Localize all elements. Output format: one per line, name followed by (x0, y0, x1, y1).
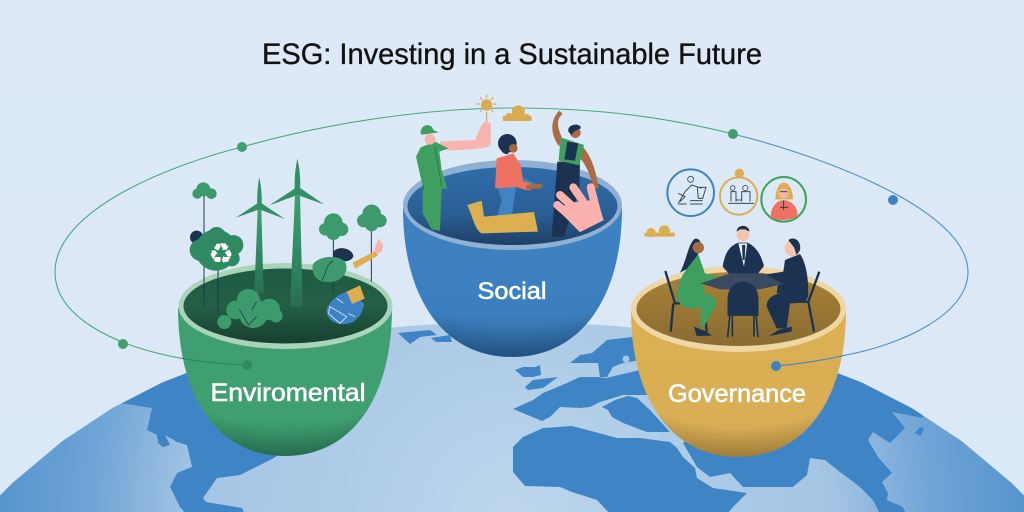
bush twigs (239, 302, 257, 325)
chair center (728, 283, 758, 337)
man with raised arm (552, 111, 599, 237)
worker in green (416, 122, 491, 231)
tree stems (204, 193, 371, 315)
wind turbine large (269, 159, 324, 307)
bowl: governance (gold) (631, 169, 846, 457)
label: environmental: Enviromental (210, 379, 366, 407)
environmental illustration (190, 159, 387, 329)
title: ESG: Investing in a Sustainable Future (262, 38, 762, 71)
yellow foot (467, 201, 538, 233)
big pink hand (557, 187, 603, 232)
globe with continents (0, 324, 1024, 512)
cloud icon (503, 105, 532, 121)
orbit line: back arc (55, 108, 968, 358)
icon: gold circle (720, 169, 757, 215)
social people illustration (416, 95, 603, 237)
tree crowns (192, 182, 387, 329)
icon: green circle (761, 177, 806, 222)
recycle tree (190, 227, 243, 271)
right man (763, 238, 808, 336)
wind turbine small (236, 177, 285, 293)
orbit line: front arcs (180, 355, 846, 366)
chair right (777, 272, 819, 332)
person behind bush (313, 238, 383, 282)
woman green (677, 239, 717, 336)
globe drop with map (327, 285, 365, 324)
label: social: Social (478, 278, 546, 305)
table (701, 273, 783, 289)
sun icon (477, 95, 497, 123)
bowl: social (blue) (403, 95, 622, 357)
bowl: environmental (green) (178, 159, 392, 456)
chair left (665, 271, 707, 332)
center man (723, 226, 764, 275)
icon: blue circle (667, 169, 714, 216)
woman in coral (495, 134, 540, 218)
recycle tree: ♻ (208, 237, 234, 271)
label: governance: Governance (668, 380, 806, 408)
lake (622, 356, 630, 362)
cloud icon (644, 225, 675, 237)
orbit nodes (118, 129, 898, 371)
governance illustration (644, 169, 819, 337)
